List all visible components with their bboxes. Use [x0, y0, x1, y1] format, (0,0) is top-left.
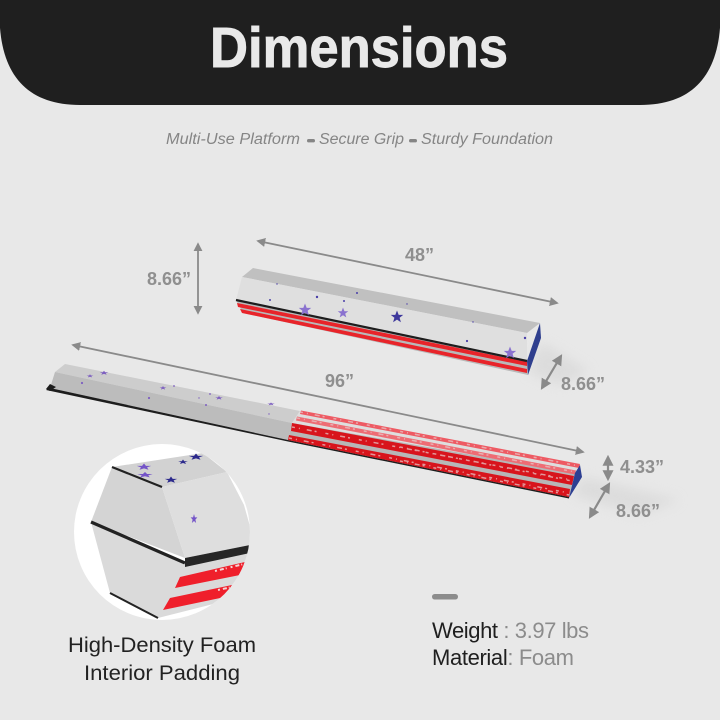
foam caption: Interior Padding [84, 661, 240, 685]
dimension labels: 48” [405, 245, 434, 265]
dimension labels: 96” [325, 371, 354, 391]
title: Dimensions [210, 16, 508, 80]
dimension labels: 4.33” [620, 457, 664, 477]
foam caption [68, 633, 256, 685]
long beam 96 inch [46, 364, 680, 515]
subtitle: Sturdy Foundation [421, 131, 553, 148]
subtitle: Secure Grip [319, 131, 404, 148]
dimension labels: 8.66” [561, 374, 605, 394]
dimension labels: 8.66” [616, 501, 660, 521]
dimension labels [147, 245, 664, 521]
dimension arrows [73, 241, 609, 517]
header banner [0, 0, 720, 105]
specifications: Weight : 3.97 lbs [432, 618, 589, 643]
short beam 48 inch [236, 268, 590, 385]
subtitle [166, 131, 553, 148]
specifications [432, 618, 589, 670]
foam detail circle [74, 444, 251, 620]
foam caption: High-Density Foam [68, 633, 256, 657]
accent dash [432, 594, 458, 600]
specifications: Material: Foam [432, 645, 574, 670]
subtitle: Multi-Use Platform [166, 131, 300, 148]
dimension labels: 8.66” [147, 269, 191, 289]
